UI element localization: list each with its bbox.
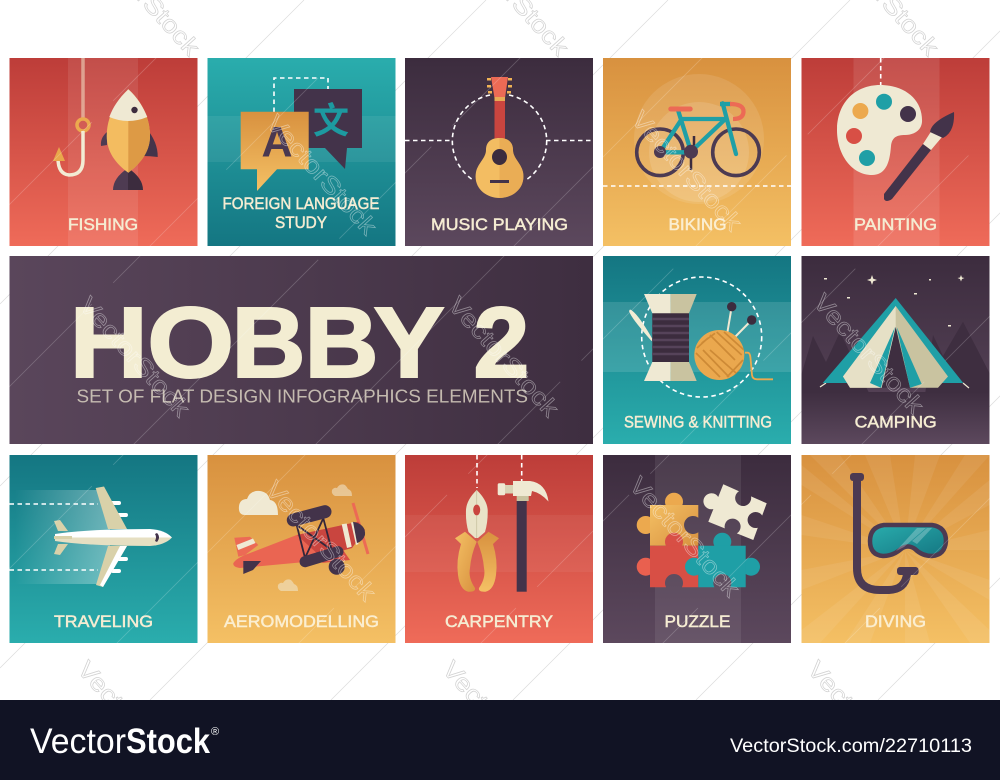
stars <box>824 275 964 326</box>
panel: sewing and knitting <box>603 256 791 444</box>
dashed hangers <box>477 455 522 488</box>
icon: orange piece <box>637 493 698 546</box>
icon: hammer <box>498 481 548 592</box>
icon: dark speech bubble <box>294 89 362 169</box>
watermark: page margins: VectorStock <box>802 656 923 780</box>
panel: main title <box>10 256 593 444</box>
label: sewing and knitting: SEWING & KNITTING <box>624 412 772 432</box>
label: traveling: TRAVELING <box>54 612 153 631</box>
watermark: over tiles: VectorStock <box>624 472 745 603</box>
label: foreign language: FOREIGN LANGUAGE <box>222 194 380 213</box>
label: camping: CAMPING <box>855 412 937 432</box>
sun rays <box>802 455 990 643</box>
icon: biplane <box>233 503 368 575</box>
dashed ground line <box>603 185 791 187</box>
label: diving: DIVING <box>865 612 926 631</box>
motion trail <box>15 490 110 584</box>
label: biking: BIKING <box>668 215 726 234</box>
icon: airplane <box>54 486 172 587</box>
dashed trails <box>10 504 98 570</box>
icon: fish hook <box>53 58 89 175</box>
title: hobby 2: 2 <box>473 287 529 399</box>
watermark: over tiles: VectorStock <box>626 106 747 237</box>
watermark: over tiles: VectorStock <box>261 110 382 241</box>
icon: red piece <box>637 533 698 587</box>
dashed hanger <box>880 58 882 85</box>
mountains <box>802 322 990 395</box>
label: carpentry: CARPENTRY <box>445 612 553 631</box>
icon: bicycle <box>637 103 759 176</box>
icon: clouds <box>239 484 352 591</box>
label: fishing: FISHING <box>68 215 138 234</box>
ground <box>802 392 990 444</box>
icon: orange speech bubble <box>241 112 309 191</box>
dashed circle and axis <box>405 95 591 180</box>
label: aeromodelling: AEROMODELLING <box>224 612 379 631</box>
panel: fishing <box>10 58 198 246</box>
panel: aeromodelling <box>208 455 396 643</box>
icon: pliers <box>455 490 499 592</box>
dashed connector <box>274 78 328 112</box>
title: hobby 2: Y <box>374 287 445 399</box>
watermark: over tiles: VectorStock <box>443 292 564 423</box>
icon: tent <box>820 298 969 388</box>
footer bar <box>0 700 1000 780</box>
icon: dark speech bubble: 文 <box>313 100 349 141</box>
icon: yarn ball <box>694 302 773 380</box>
watermark: over tiles <box>74 106 929 607</box>
panel: diving <box>802 455 990 643</box>
panel: music playing <box>405 58 593 246</box>
icon: needle <box>629 310 653 341</box>
title: hobby 2 <box>70 287 529 399</box>
title: hobby 2: O <box>147 287 234 399</box>
watermark: over tiles: VectorStock <box>74 292 195 423</box>
icon: guitar <box>476 77 523 198</box>
icon: palette <box>837 85 922 175</box>
panel: painting <box>802 58 990 246</box>
subtitle: SET OF FLAT DESIGN INFOGRAPHICS ELEMENTS <box>76 386 528 406</box>
footer logo: VectorStock <box>30 722 210 761</box>
watermark: over tiles: VectorStock <box>260 476 381 607</box>
watermark: page margins: VectorStock <box>72 656 193 780</box>
panel: camping <box>802 256 990 444</box>
panel: biking <box>603 58 791 246</box>
icon: thread spool <box>644 294 697 381</box>
panel: carpentry <box>405 455 593 643</box>
icon: diving mask <box>870 525 946 556</box>
panel: puzzle <box>603 455 791 643</box>
icon: paint brush <box>884 112 954 201</box>
label: painting: PAINTING <box>854 215 937 234</box>
icon: snorkel <box>850 473 919 590</box>
icon: teal piece <box>685 533 760 587</box>
footer registered mark: ® <box>211 726 219 738</box>
watermark: page margins: VectorStock <box>437 656 558 780</box>
panel: foreign language study <box>208 58 396 246</box>
label: music playing: MUSIC PLAYING <box>431 215 568 234</box>
icon: cream piece <box>703 484 767 540</box>
footer url: VectorStock.com/22710113 <box>730 736 972 757</box>
label: puzzle: PUZZLE <box>664 612 730 631</box>
title: hobby 2: B <box>304 287 379 399</box>
title: hobby 2: B <box>232 287 306 399</box>
dashed circle <box>642 277 762 397</box>
icon: orange speech bubble: A <box>261 118 293 166</box>
panel: traveling <box>10 455 198 643</box>
icon: fish <box>101 89 158 190</box>
watermark: over tiles: VectorStock <box>808 289 929 420</box>
label: study: STUDY <box>275 213 327 232</box>
title: hobby 2: H <box>70 287 148 399</box>
